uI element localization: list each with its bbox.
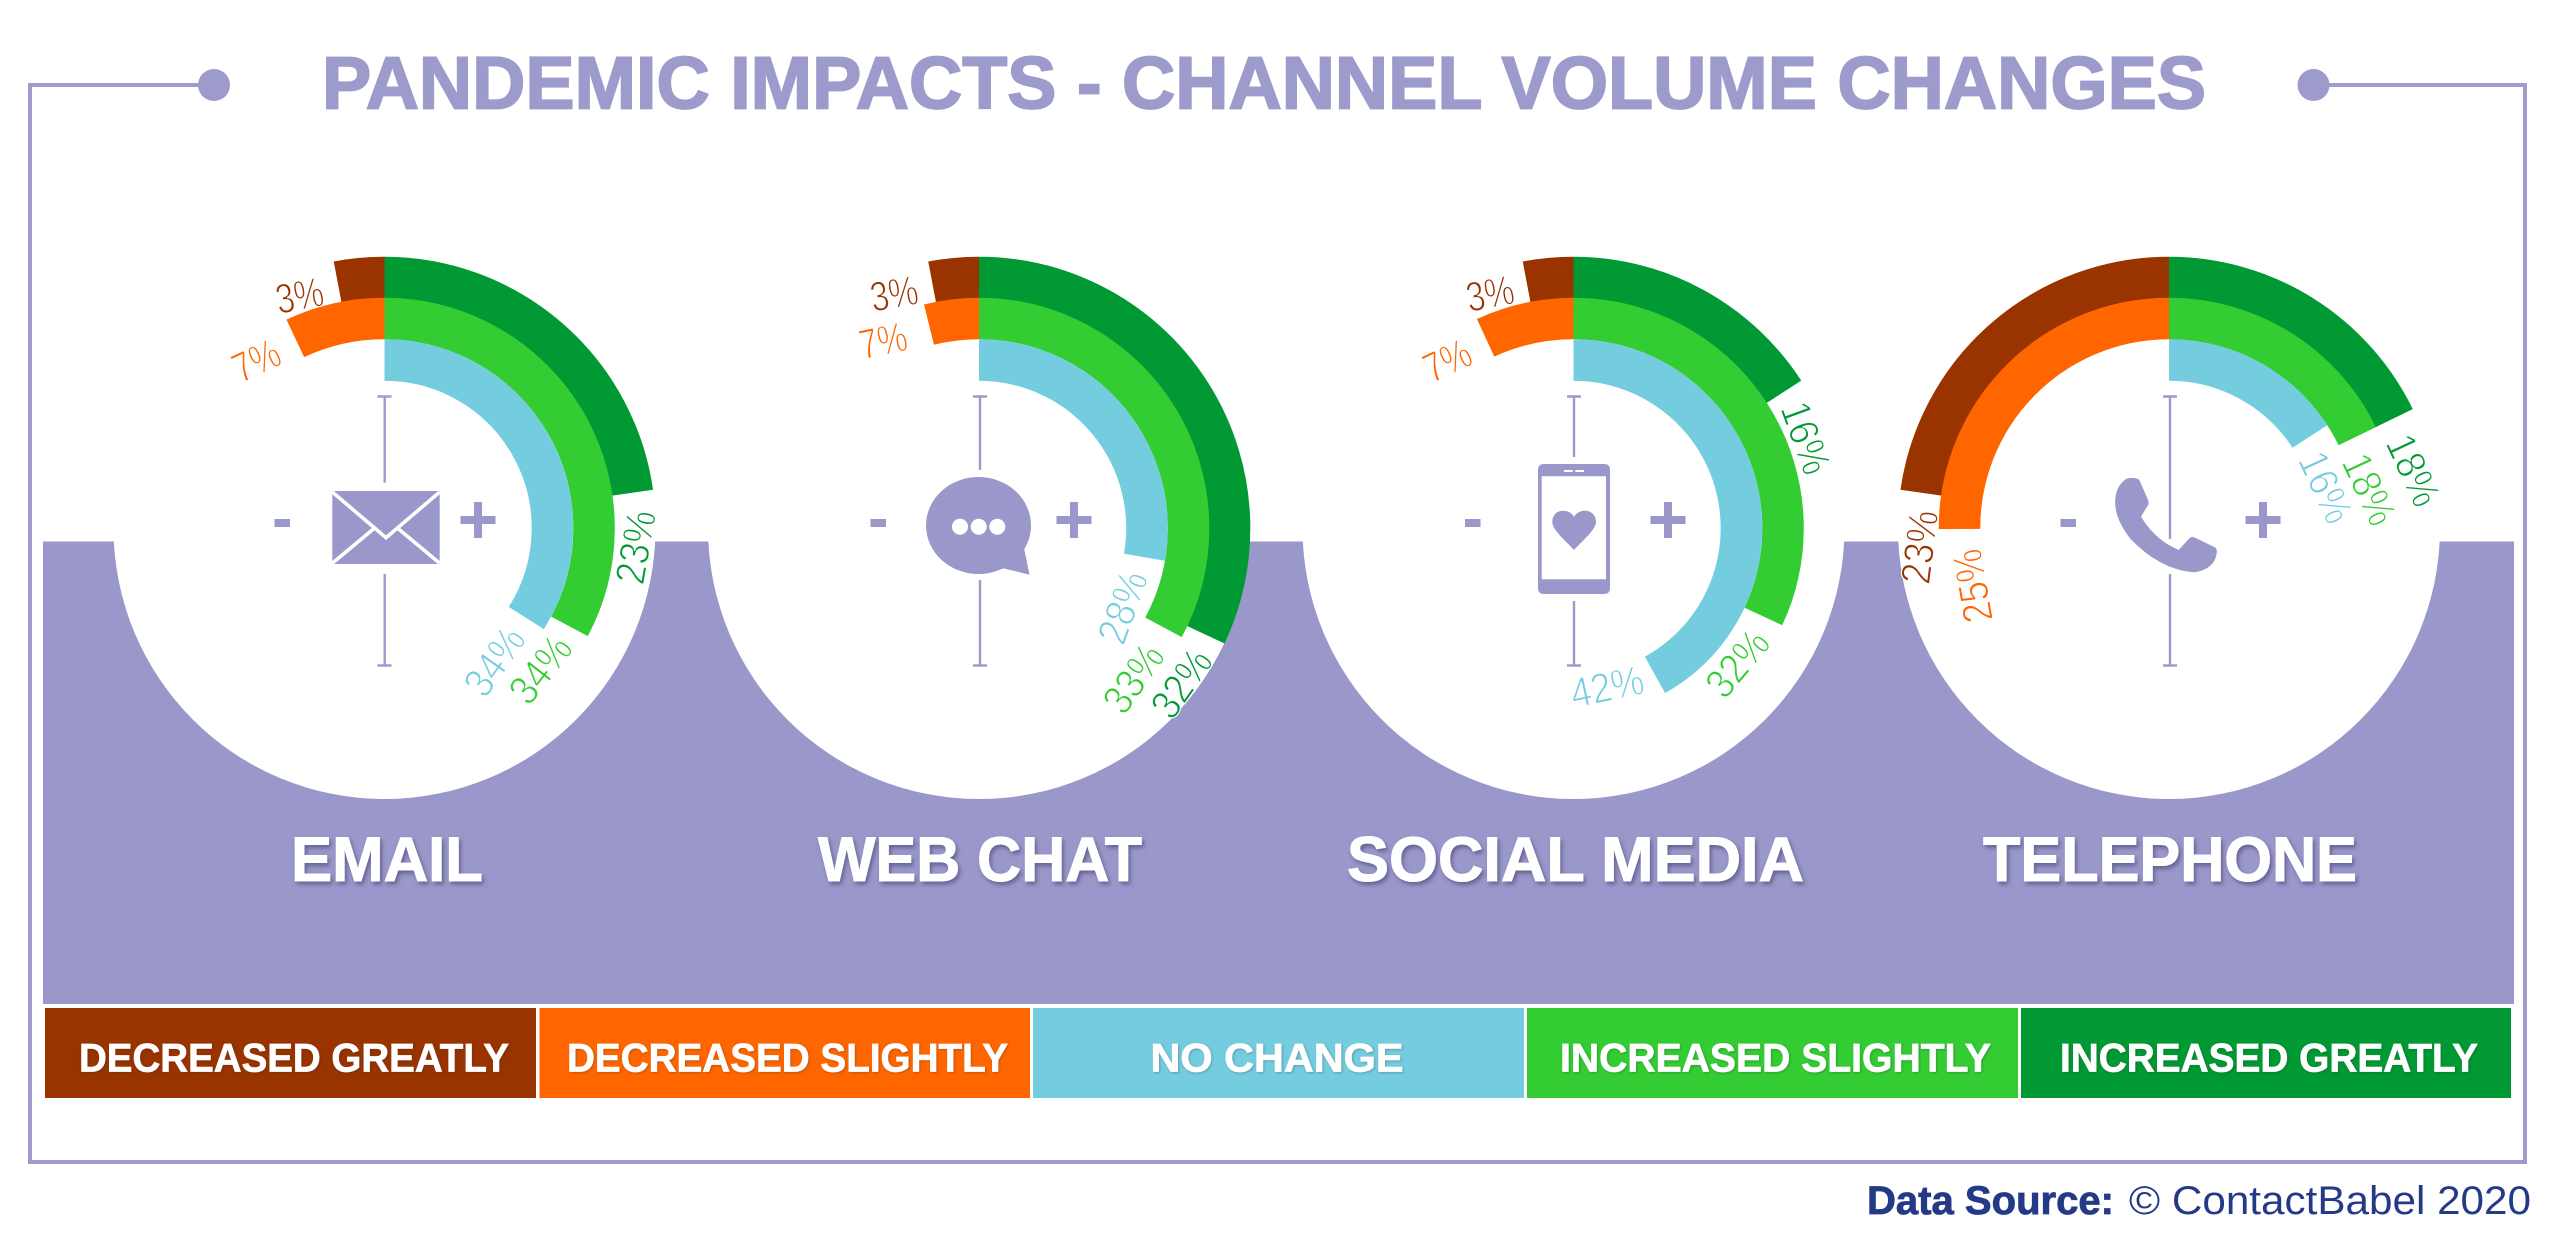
arc: web chat decreased slightly xyxy=(929,318,979,325)
label: email 23%: 23% xyxy=(606,507,665,588)
minus sign xyxy=(274,519,290,527)
arc: telephone increased slightly xyxy=(2169,318,2357,436)
label: telephone 23%: 23% xyxy=(1892,507,1947,587)
label: social media 7%: 7% xyxy=(1416,329,1479,392)
legend item: decreased greatly xyxy=(45,1008,536,1098)
icon: envelope xyxy=(332,491,440,564)
label: web chat 7%: 7% xyxy=(855,313,911,368)
label: email 34% increased slightly: 34% xyxy=(499,626,582,713)
label: email 34% no change: 34% xyxy=(454,617,535,705)
label: email 7%: 7% xyxy=(225,329,288,392)
plus sign xyxy=(1650,502,1686,538)
minus sign xyxy=(1465,519,1480,527)
arc: social media increased greatly xyxy=(1574,278,1784,392)
chart: web chat xyxy=(855,266,1230,727)
legend item: no change xyxy=(1033,1008,1524,1098)
arc: web chat increased greatly xyxy=(979,278,1230,635)
plus sign xyxy=(2246,502,2280,538)
channel name: social media: SOCIAL MEDIA xyxy=(1347,825,1804,895)
label: telephone 18% increased greatly: 18% xyxy=(2377,427,2450,514)
arc: social media decreased slightly xyxy=(1486,318,1574,338)
legend item: increased greatly xyxy=(2021,1008,2511,1098)
legend item: increased slightly xyxy=(1527,1008,2018,1098)
axis: email xyxy=(378,396,392,666)
axis: telephone xyxy=(2163,396,2177,666)
label: email 3%: 3% xyxy=(272,268,328,323)
plus sign xyxy=(1056,502,1092,538)
arc: email no change xyxy=(384,360,552,618)
arc: email increased greatly xyxy=(384,278,632,493)
arc: web chat no change xyxy=(979,360,1147,557)
minus sign xyxy=(870,519,886,527)
label: social media 16%: 16% xyxy=(1771,395,1841,481)
arc: telephone decreased slightly xyxy=(1959,318,2169,529)
label: web chat 33%: 33% xyxy=(1093,634,1174,722)
arc: telephone increased greatly xyxy=(2169,278,2394,418)
channel name: telephone: TELEPHONE xyxy=(1983,825,2357,895)
data source: Data Source: xyxy=(1867,1179,2114,1223)
axis: social media xyxy=(1567,396,1581,666)
legend item: increased slightly: INCREASED SLIGHTLY xyxy=(1560,1036,1991,1080)
legend item: increased greatly: INCREASED GREATLY xyxy=(2060,1036,2478,1080)
arc: web chat decreased greatly xyxy=(932,277,979,282)
arc: email decreased greatly xyxy=(338,277,384,282)
label: web chat 28%: 28% xyxy=(1088,564,1157,650)
arc: social media decreased greatly xyxy=(1527,277,1574,282)
channel name: web chat: WEB CHAT xyxy=(818,825,1142,895)
lilac panel with semicircular cut-outs xyxy=(43,257,2514,1004)
label: social media 32%: 32% xyxy=(1696,620,1779,707)
arc: web chat increased slightly xyxy=(979,318,1189,627)
arc: email increased slightly xyxy=(384,318,594,626)
legend item: decreased greatly: DECREASED GREATLY xyxy=(79,1036,509,1080)
chart: telephone xyxy=(1892,278,2450,666)
legend xyxy=(45,1008,2511,1098)
label: telephone 25%: 25% xyxy=(1943,545,2002,626)
arc: email decreased slightly xyxy=(295,318,384,338)
icon: speech bubble xyxy=(926,477,1031,575)
legend item: no change: NO CHANGE xyxy=(1150,1036,1404,1080)
label: social media 3%: 3% xyxy=(1462,266,1518,321)
arc: telephone decreased greatly xyxy=(1921,278,2169,493)
label: telephone 18% increased slightly: 18% xyxy=(2333,446,2406,533)
label: web chat 3%: 3% xyxy=(866,266,922,321)
title: PANDEMIC IMPACTS - CHANNEL VOLUME CHANGES xyxy=(322,42,2206,124)
data source: © ContactBabel 2020 xyxy=(2129,1179,2531,1223)
chart: email xyxy=(225,268,665,713)
arc: social media increased slightly xyxy=(1574,318,1783,616)
label: social media 42%: 42% xyxy=(1566,656,1648,717)
chart: social media xyxy=(1416,266,1841,717)
data source xyxy=(1867,1179,2531,1223)
legend item: decreased slightly xyxy=(540,1008,1030,1098)
label: telephone 16%: 16% xyxy=(2289,444,2363,531)
icon: telephone handset xyxy=(2115,478,2217,572)
minus sign xyxy=(2060,519,2076,527)
legend item: decreased slightly: DECREASED SLIGHTLY xyxy=(567,1036,1008,1080)
arc: social media no change xyxy=(1574,360,1741,675)
channel name: email: EMAIL xyxy=(291,825,483,895)
plus sign xyxy=(460,502,496,538)
axis: web chat xyxy=(973,396,987,666)
icon: smartphone with heart xyxy=(1538,464,1610,594)
arc: telephone no change xyxy=(2169,360,2310,436)
label: web chat 32%: 32% xyxy=(1141,639,1222,727)
